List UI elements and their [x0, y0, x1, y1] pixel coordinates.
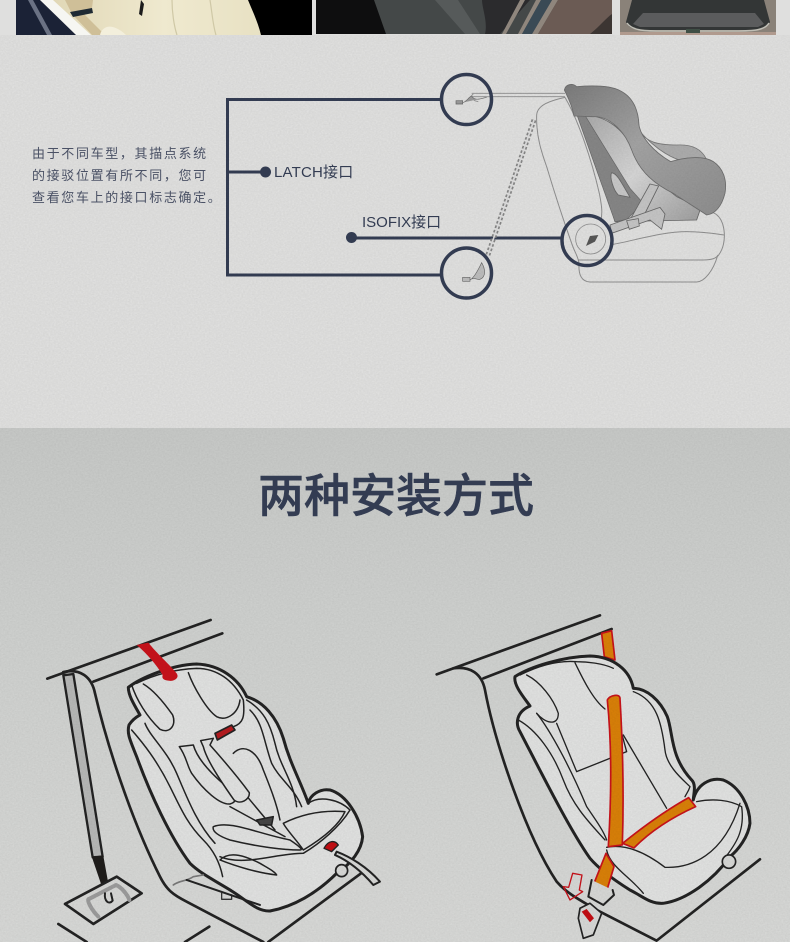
buckle [578, 903, 602, 938]
vehicle seat outline [537, 97, 724, 282]
floor anchor plate [65, 877, 142, 924]
callout ring: top tether [442, 74, 492, 124]
text: anchor system description: 查看您车上的接口标志确定。 [32, 190, 222, 205]
text: anchor system description [32, 146, 222, 205]
seat shell [128, 664, 363, 911]
isofix connector [173, 875, 260, 905]
anchor circle [576, 224, 606, 254]
adjuster knob [722, 855, 736, 868]
vehicle roof and pillar [47, 620, 363, 942]
label: LATCH: LATCH接口 [274, 164, 353, 181]
seat belt: lower strap [593, 853, 614, 897]
illustration: right seat belt installation [437, 615, 760, 941]
marker: LATCH dot [260, 166, 271, 178]
diagram: anchor leader lines [227, 100, 562, 275]
seat inner lines [132, 668, 350, 877]
child seat inner back [583, 115, 701, 222]
text: anchor system description: 的接驳位置有所不同，您可 [32, 168, 208, 183]
text: anchor system description: 由于不同车型，其描点系统 [32, 146, 208, 161]
background: upper section [0, 0, 790, 428]
top tether hook [456, 96, 487, 104]
label: ISOFIX: ISOFIX接口 [362, 214, 441, 231]
seat belt tongue [588, 880, 614, 905]
buckle straps [610, 184, 665, 233]
side tether hook [463, 263, 485, 281]
harness slot [215, 725, 235, 740]
top headrest shell [564, 84, 726, 215]
marker: ISOFIX dot [346, 232, 357, 243]
red down arrow [563, 873, 583, 900]
lower anchor hook [586, 235, 598, 246]
side red marker [324, 842, 338, 852]
background: lower section [0, 428, 790, 942]
seat shell [515, 656, 750, 903]
callout ring: lower strap [442, 248, 492, 298]
upper shoulder belt [602, 631, 615, 660]
dashed lower strap [487, 120, 534, 257]
illustration: child seat on vehicle seat [456, 84, 726, 282]
seat belt: lap strap [623, 798, 696, 848]
vehicle roof and pillar [437, 615, 760, 941]
seat inner lines [518, 661, 742, 893]
grey tether strap [63, 674, 107, 887]
photo: car boot [620, 0, 776, 35]
seat belts to anchors [472, 93, 565, 102]
shell back panel [577, 116, 643, 222]
photo: dark car seat and door [316, 0, 612, 34]
illustration: left ISOFIX installation [47, 620, 380, 942]
rear shell wing [640, 132, 706, 162]
callout ring: isofix [562, 216, 612, 266]
seat slot [611, 173, 630, 197]
harness pads and straps [179, 738, 285, 837]
red top tether [137, 643, 178, 681]
heading: two install methods: 两种安装方式 [258, 460, 534, 526]
seat belt: shoulder strap [607, 695, 623, 847]
adjuster handle [335, 852, 380, 885]
photo: beige leather car seat [16, 0, 312, 35]
